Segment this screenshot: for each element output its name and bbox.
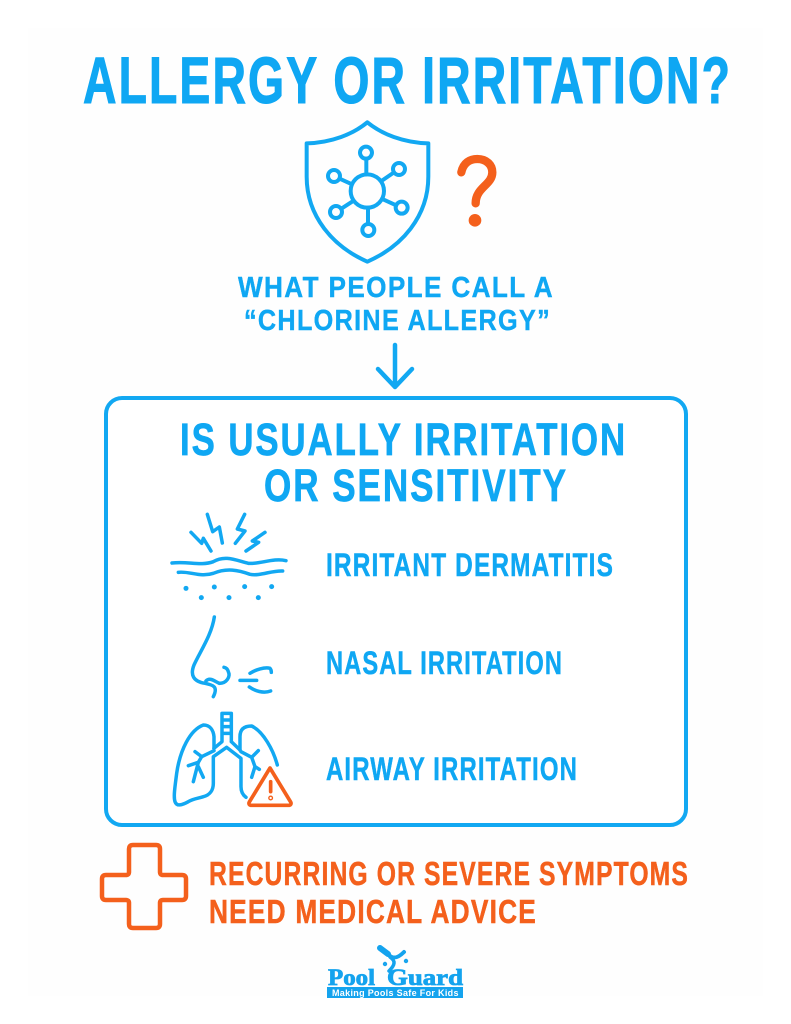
logo: pool guard: Making Pools Safe For Kids <box>332 988 459 998</box>
icon: medical cross <box>102 845 186 928</box>
subtitle: WHAT PEOPLE CALL A <box>238 272 554 304</box>
logo tagline <box>327 987 463 998</box>
subtitle: “CHLORINE ALLERGY” <box>244 305 551 337</box>
label: irritant dermatitis: IRRITANT DERMATITIS <box>326 547 614 583</box>
arrow: down <box>378 345 412 387</box>
subtitle <box>238 272 554 337</box>
callout: medical advice: NEED MEDICAL ADVICE <box>209 893 537 930</box>
panel heading: IS USUALLY IRRITATION <box>180 414 627 465</box>
logo wordmark <box>328 965 463 990</box>
panel heading: OR SENSITIVITY <box>264 460 568 511</box>
label: nasal irritation: NASAL IRRITATION <box>326 645 563 681</box>
icon: irritated skin <box>172 514 286 600</box>
callout: medical advice <box>209 855 689 930</box>
logo: pool guard <box>327 948 463 998</box>
icon: lungs with warning <box>174 713 291 805</box>
panel heading <box>180 414 627 511</box>
icon: question mark <box>461 159 492 227</box>
icon: shield with molecule <box>307 122 428 262</box>
label: airway irritation: AIRWAY IRRITATION <box>326 751 578 787</box>
icon: water splash <box>380 948 407 971</box>
panel: irritation <box>106 398 686 825</box>
logo wordmark: Pool <box>328 965 375 990</box>
logo wordmark: Guard <box>387 965 463 990</box>
icon: nose <box>192 617 271 697</box>
